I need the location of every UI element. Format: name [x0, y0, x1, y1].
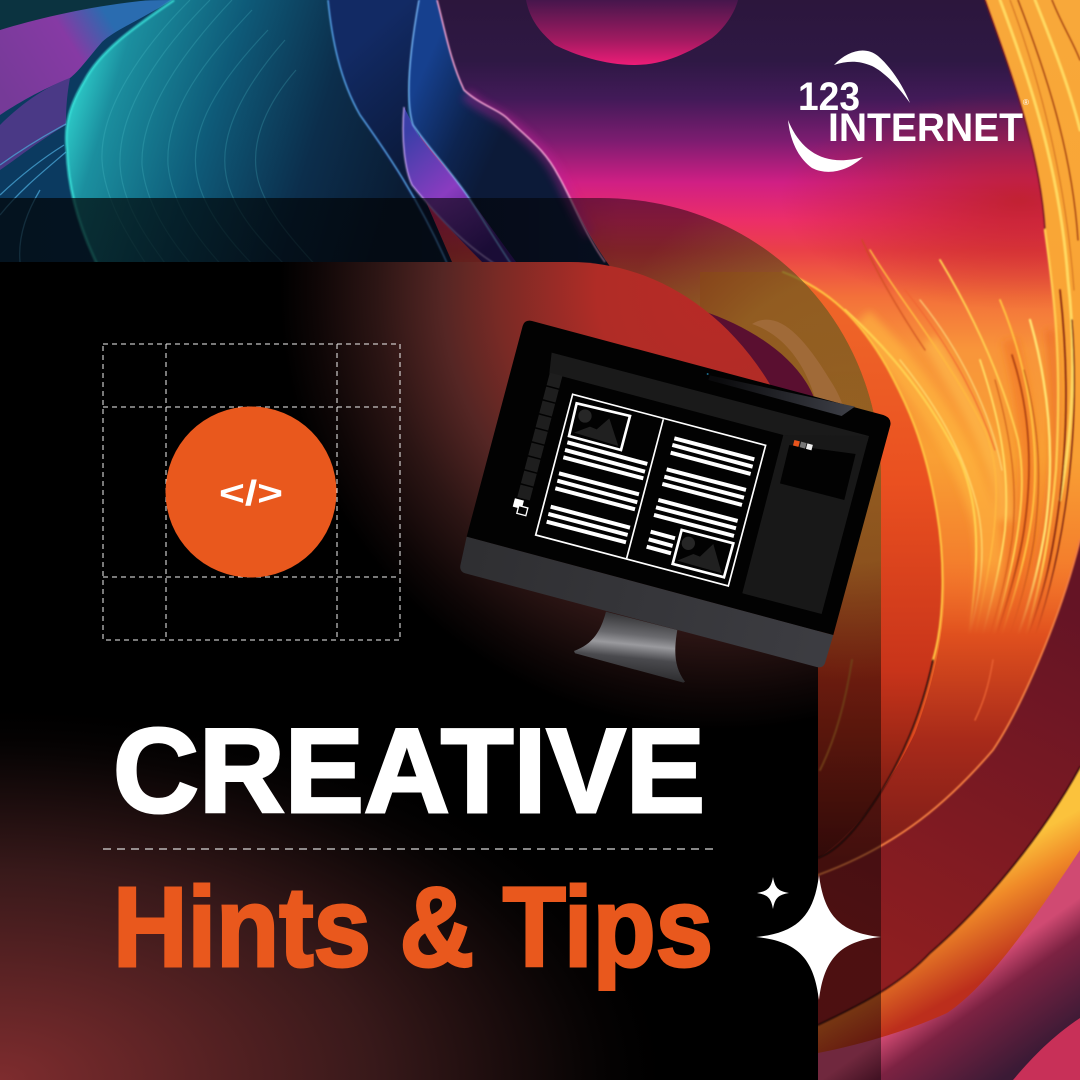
- tool squares: [517, 373, 562, 500]
- wave: fold band lower: [818, 480, 1080, 875]
- wave: left thin streaks: [0, 124, 66, 262]
- wave: yellow band: [818, 767, 1080, 1080]
- wave: dome rim glow: [66, 0, 174, 270]
- registered mark: ®: [1023, 98, 1029, 107]
- wave: amber ribbon top right: [985, 0, 1080, 440]
- sparkle: large star: [756, 875, 881, 1000]
- translucent arch overlay: [0, 198, 881, 1080]
- orange code badge: [166, 406, 336, 578]
- fill and stroke icon: [513, 498, 528, 516]
- wave: magenta blob: [526, 0, 738, 65]
- wave: fold highlights: [328, 0, 605, 270]
- app right panel: [742, 435, 869, 614]
- sparkle: small star: [757, 877, 789, 909]
- wave: inner red-orange fold: [700, 272, 943, 858]
- title: CREATIVE: CREATIVE: [113, 704, 705, 838]
- logo text INTERNET: INTERNET: [828, 106, 1023, 150]
- brand logo: [788, 50, 1029, 172]
- main black panel: [0, 262, 818, 1080]
- webcam dot: [707, 373, 709, 375]
- code symbol: </>: [219, 474, 283, 513]
- wave: soft tonal bands: [860, 320, 1055, 670]
- logo text 123: 123: [798, 75, 860, 119]
- wave: dark top-left corner: [0, 0, 150, 30]
- subtitle: Hints & Tips: Hints & Tips: [113, 864, 713, 990]
- wave: fold edge lines: [783, 272, 1080, 1025]
- olive tint in overlay arch: [600, 198, 881, 740]
- plum crescent behind panel: [700, 310, 815, 400]
- page layout artboard: [536, 394, 766, 586]
- wave: magenta glow along fold: [466, 94, 590, 235]
- wave: amber streaks: [845, 0, 1080, 740]
- image placeholder bottom: [673, 530, 733, 577]
- app top bar: [549, 353, 869, 443]
- top bezel highlight: [708, 375, 855, 416]
- colour well: [780, 445, 856, 500]
- image placeholder top: [569, 403, 630, 450]
- wave: maroon field: [818, 540, 1080, 1080]
- monitor screen body: [467, 321, 891, 635]
- dashed divider: [103, 848, 717, 850]
- wave: pink corner band: [1013, 1018, 1080, 1080]
- colour swatches: [793, 440, 813, 450]
- wave: left purple: [0, 0, 172, 115]
- logo bottom swoosh: [788, 120, 863, 172]
- layout grid: [103, 344, 400, 640]
- wave: dome ribs: [102, 0, 320, 270]
- wave: teal dome: [66, 0, 450, 270]
- desktop monitor illustration: [460, 321, 891, 683]
- monitor stand: [574, 612, 685, 683]
- wave: plum band: [818, 850, 1080, 1080]
- wave: left blue field: [0, 0, 420, 280]
- wave: navy fold: [409, 0, 620, 280]
- text lines: [547, 438, 754, 553]
- wave: purple sliver: [403, 107, 530, 280]
- monitor chin: [460, 537, 833, 667]
- wave: blue fold: [328, 0, 452, 262]
- logo top swoosh: [834, 50, 910, 103]
- tan crescent behind panel: [752, 320, 845, 412]
